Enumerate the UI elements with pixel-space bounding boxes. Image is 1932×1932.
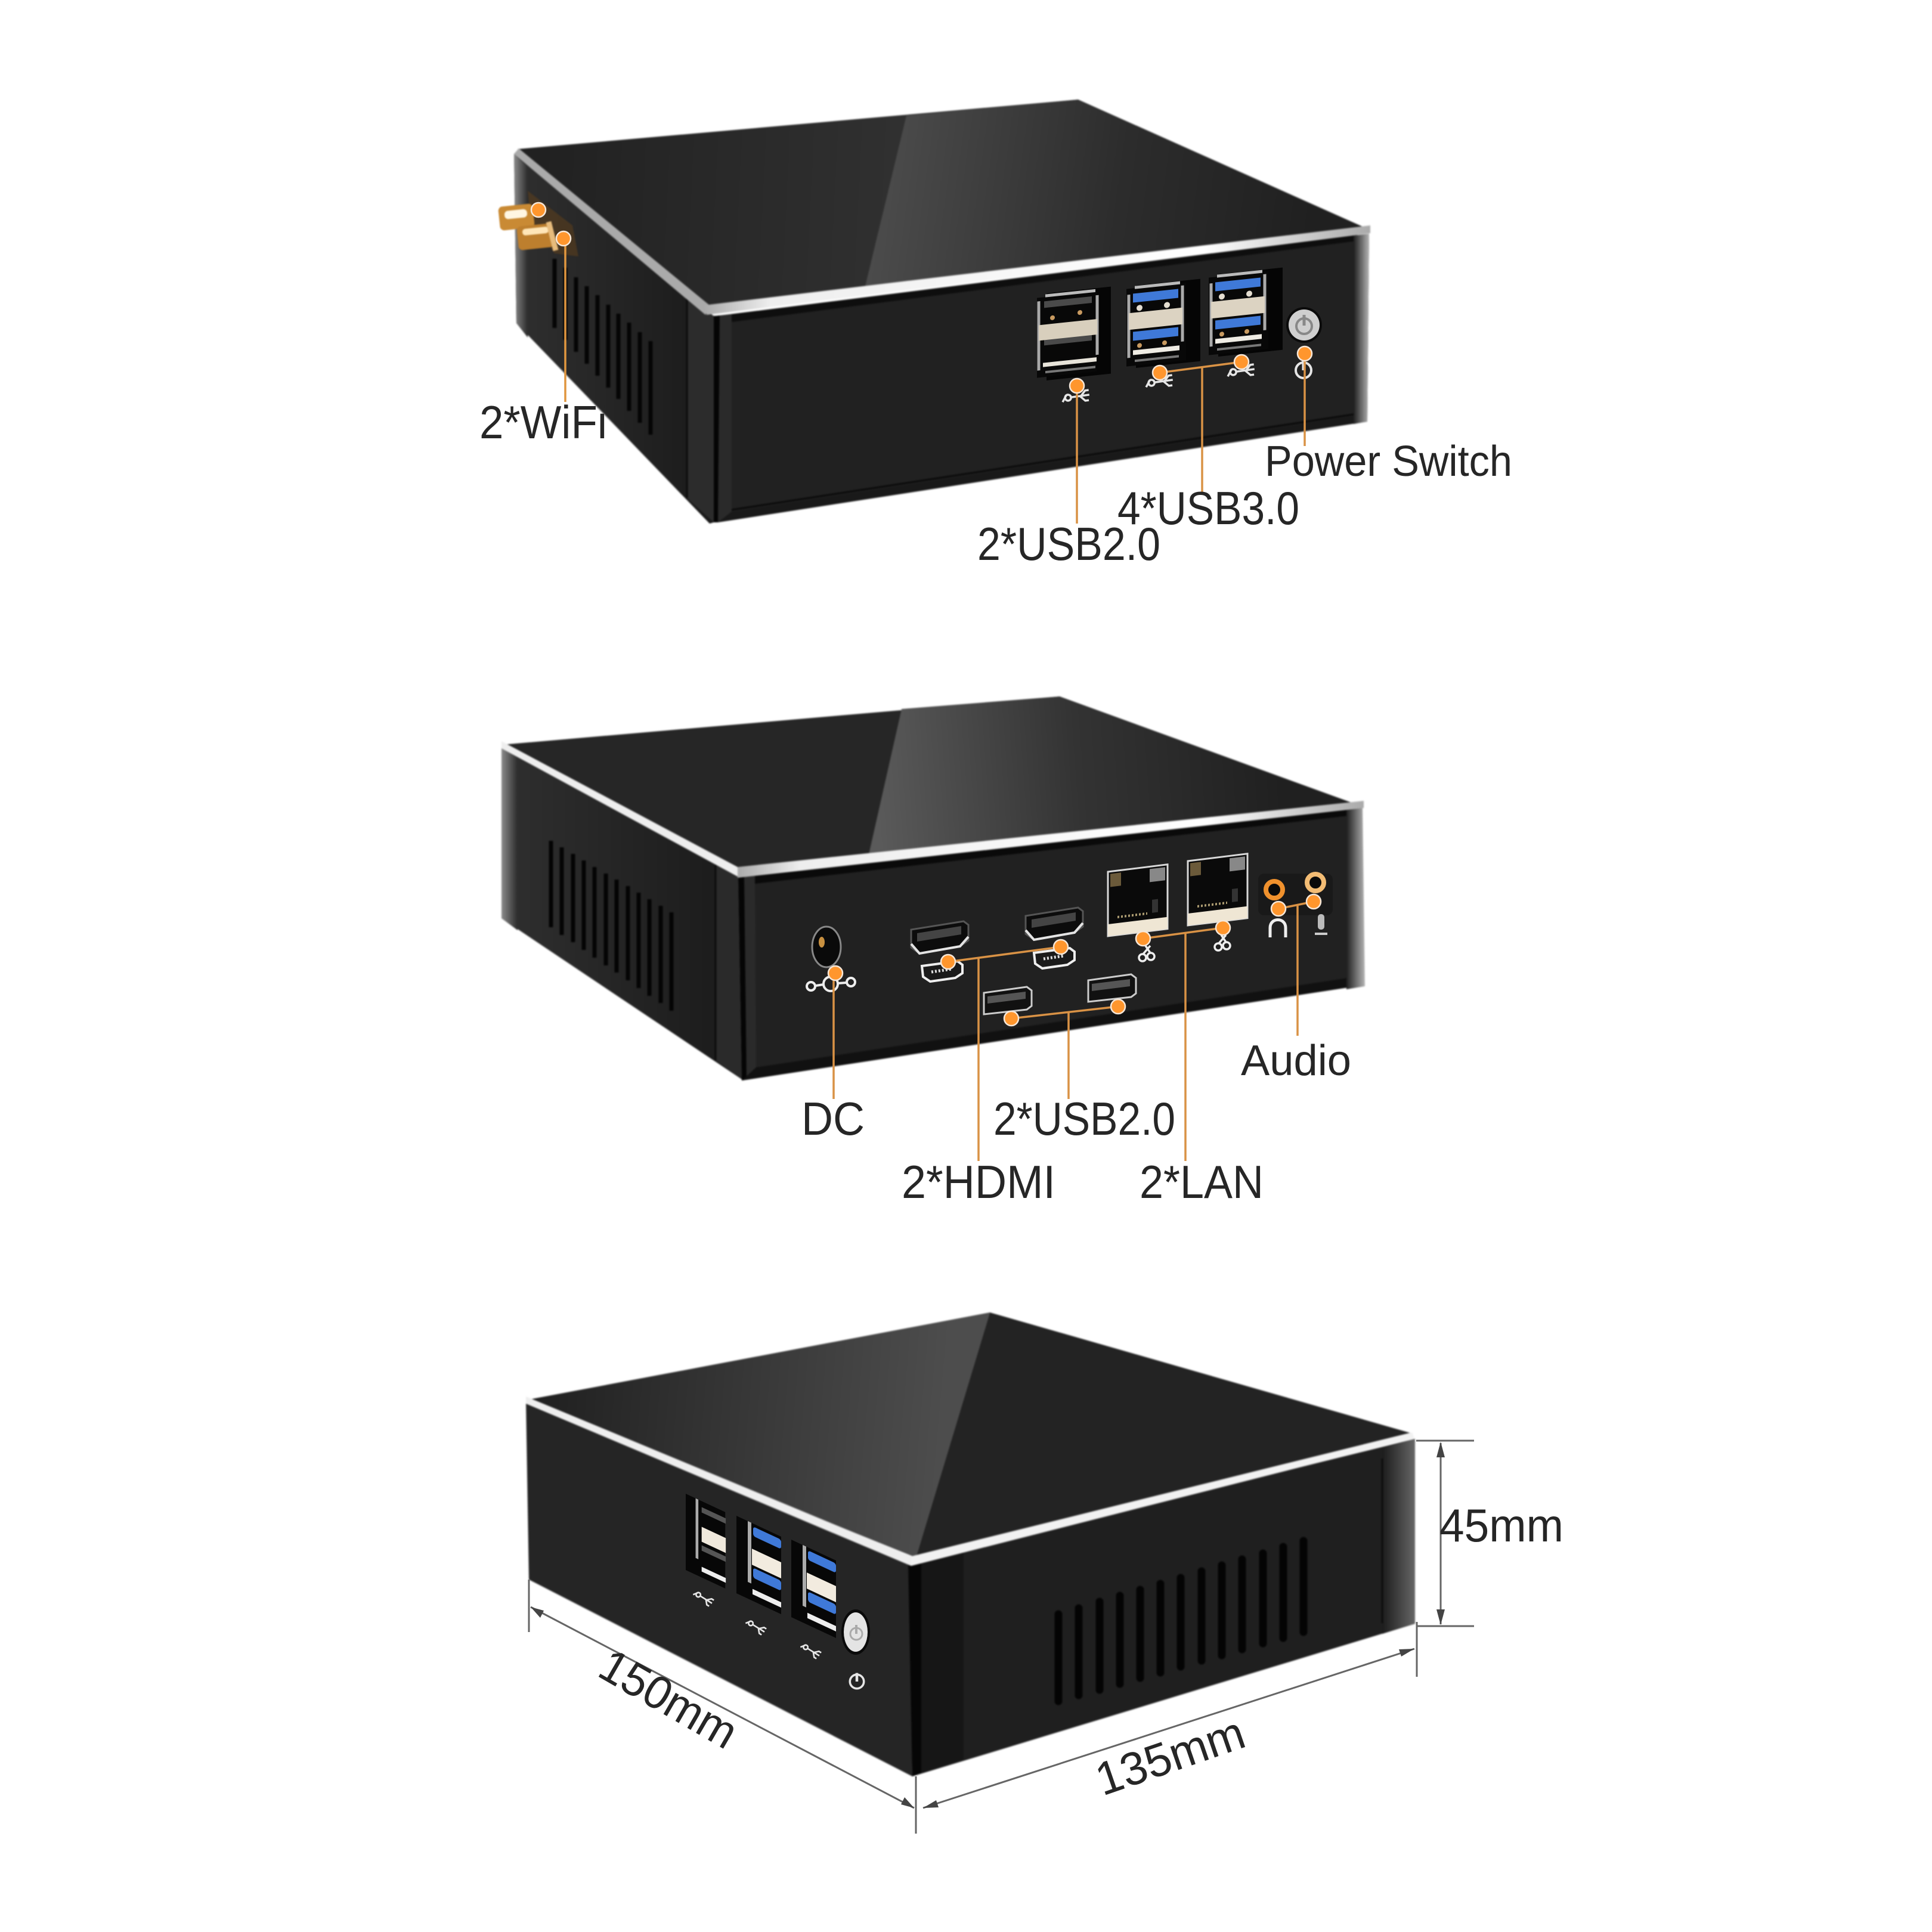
USB 3.0 port, angled B <box>791 1540 836 1638</box>
USB 2.0 port, angled <box>686 1494 726 1589</box>
USB 2.0 port A <box>984 987 1032 1014</box>
HDMI port 1 <box>911 921 968 953</box>
label: 4*USB3.0: 4*USB3.0 <box>1117 482 1299 534</box>
callout lines and dots <box>531 203 1312 524</box>
box 3 body <box>526 1312 1415 1776</box>
label: 2*USB2.0: 2*USB2.0 <box>977 518 1160 570</box>
USB 3.0 double port B <box>1209 268 1283 358</box>
panel: mini PC rear view with connectors <box>501 696 1365 1208</box>
dimension: 45mm <box>1416 1441 1474 1626</box>
audio jacks and icons <box>1258 874 1333 937</box>
LAN port 2 <box>1188 854 1247 925</box>
icon: WiFi antenna connectors <box>498 191 578 256</box>
callout lines and dots <box>828 894 1321 1161</box>
icon: USB symbols <box>1061 364 1255 404</box>
icon: LAN symbols <box>1139 935 1230 961</box>
icon: power button <box>1286 307 1322 378</box>
label: DC: DC <box>801 1092 865 1145</box>
icon: HDMI symbols <box>922 948 1075 982</box>
dimension: 150mm <box>529 1580 916 1834</box>
panel: mini PC front view with USB ports <box>479 100 1512 570</box>
icon: USB symbols <box>692 1589 821 1659</box>
label: 45mm: 45mm <box>1439 1499 1563 1552</box>
USB 2.0 port B <box>1088 974 1136 1002</box>
USB 2.0 double port <box>1037 287 1111 382</box>
label: 150mm: 150mm <box>590 1639 747 1759</box>
panel: mini PC dimensions view <box>526 1312 1563 1834</box>
box 2 body <box>501 696 1365 1080</box>
DC jack <box>812 927 841 967</box>
label: 2*WiFi: 2*WiFi <box>479 396 607 448</box>
LAN port 1 <box>1108 865 1168 936</box>
label: 2*USB2.0: 2*USB2.0 <box>993 1092 1175 1145</box>
label: Power Switch: Power Switch <box>1265 438 1512 485</box>
icon: power button <box>841 1609 870 1689</box>
label: 135mm: 135mm <box>1089 1706 1252 1806</box>
label: 2*LAN: 2*LAN <box>1140 1156 1264 1208</box>
label: 2*HDMI: 2*HDMI <box>902 1156 1055 1208</box>
icon: DC symbol <box>807 977 855 991</box>
label: Audio: Audio <box>1241 1037 1351 1085</box>
USB 3.0 port, angled A <box>736 1516 781 1614</box>
dimension: 135mm <box>923 1622 1417 1808</box>
USB 3.0 double port A <box>1126 279 1200 369</box>
box 1 body <box>514 100 1370 524</box>
HDMI port 2 <box>1026 908 1083 940</box>
